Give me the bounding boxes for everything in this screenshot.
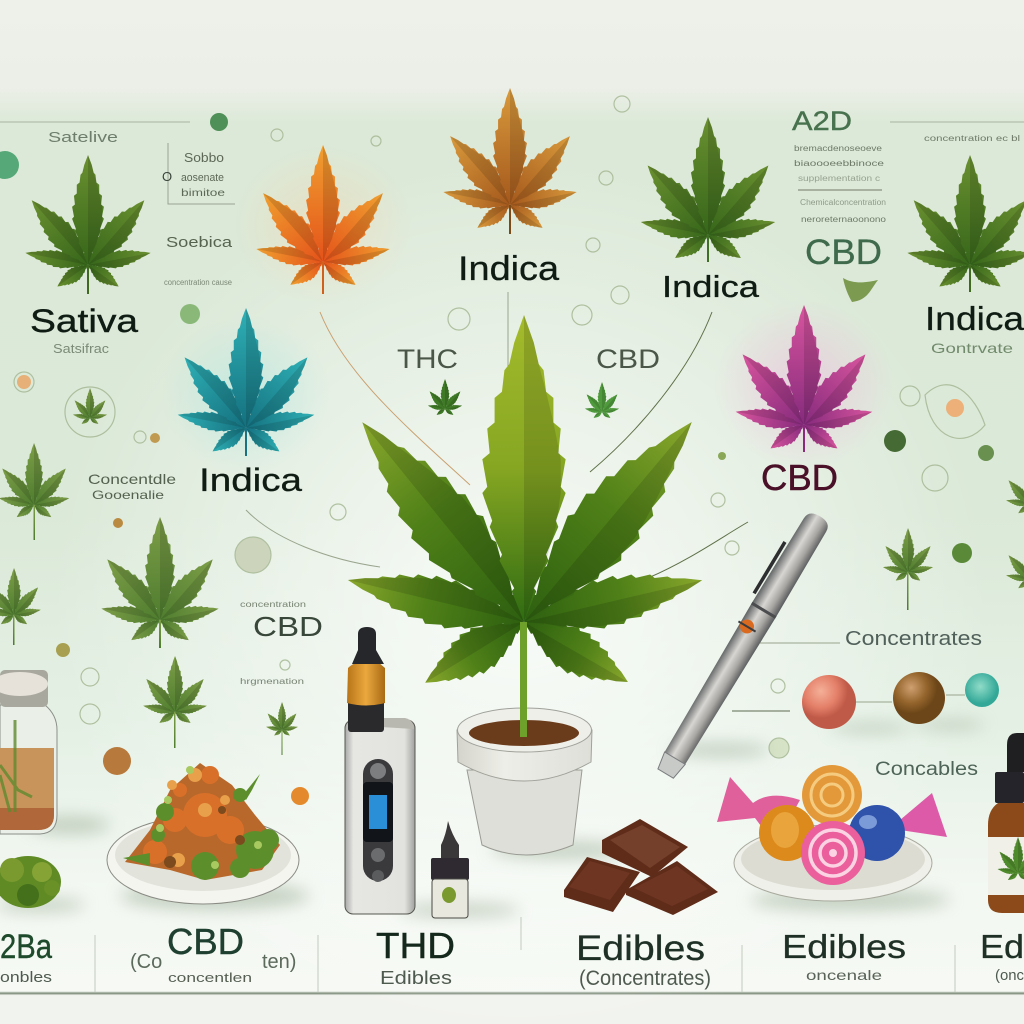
label: Edibles right: Edibles [782, 928, 906, 965]
label: A2D: A2D [792, 106, 852, 136]
text lines top right [794, 134, 1020, 224]
label: 2Ba: 2Ba [0, 928, 52, 966]
bottom labels [0, 921, 1024, 990]
scattered dots [0, 113, 994, 805]
label: small sativa under: Satsifrac [53, 341, 110, 356]
label: Edibles center: Edibles [576, 929, 705, 968]
label: Indica far right: Indica [925, 300, 1024, 337]
icon: small leaf THC [427, 379, 463, 417]
label: oncenale: oncenale [806, 967, 882, 983]
text lines top right: supplementation c [798, 174, 880, 183]
dropper bottle [988, 733, 1024, 913]
leaflet top [482, 315, 566, 622]
tiny text under Soebica: concentration cause [164, 278, 233, 287]
small bottle [431, 821, 469, 918]
label: Sativa: Sativa [30, 303, 138, 339]
leaf: small doodle [72, 388, 108, 426]
pot [457, 622, 592, 855]
object shadows [0, 720, 985, 917]
side leaves [0, 388, 1024, 755]
leaflet lower left [413, 602, 536, 702]
text lines top right: biaoooeebbinoce [794, 159, 885, 168]
leaf: magenta [714, 300, 894, 470]
leaf: left 4 [141, 656, 209, 748]
notes box top left: bimitoe [181, 188, 226, 199]
label: Concentrates right: Concentrates [845, 628, 982, 650]
label: CBD top right: CBD [805, 233, 882, 272]
text lines top right: neroreternaoonono [801, 215, 887, 224]
leaf: green top right [637, 117, 779, 265]
leaflet lateral right [518, 556, 708, 646]
leaf: right 1 [881, 528, 935, 610]
label: concentrate left: Gooenalie [92, 488, 164, 502]
jar [0, 670, 57, 834]
leaflet lower right [513, 602, 639, 702]
leaf: left 3 [0, 568, 42, 645]
label: Seebica: Soebica [166, 234, 233, 251]
label: paren left: (Co [130, 951, 162, 973]
leaflet upper left [335, 400, 551, 644]
food pile [123, 763, 280, 880]
label: CBD bottom: CBD [167, 921, 244, 962]
text lines top right: Chemicalconcentration [800, 198, 886, 207]
label: paren right: ten) [262, 951, 296, 973]
leaf: green far right [904, 155, 1024, 293]
text lines top right: bremacdenoseoeve [794, 144, 883, 153]
label: Indica teal: Indica [199, 462, 302, 498]
vape device [345, 627, 415, 914]
label: THC: THC [397, 344, 458, 374]
chocolate [564, 819, 718, 915]
leaf: orange [233, 145, 413, 305]
main cannabis plant [335, 315, 718, 702]
notes box top left: aosenate [181, 172, 224, 184]
label: Edibles far left: onbles [0, 969, 52, 986]
leaf: amber [439, 88, 581, 234]
leaflet upper right [497, 400, 718, 644]
label: concentrate left: Concentdle [88, 471, 176, 487]
leaflet lateral left [342, 556, 530, 646]
label: concentrate left [88, 471, 176, 502]
label: Contrate: Gontrvate [931, 340, 1013, 356]
leaf: green sativa [22, 155, 154, 294]
stem [520, 622, 527, 737]
leaf: left 2 [98, 517, 222, 648]
label: THD: THD [376, 925, 455, 966]
scattered doodles [14, 96, 985, 758]
icon: small leaf CBD [584, 382, 620, 420]
leaf: right 2 [1005, 463, 1024, 516]
candy plate [717, 765, 947, 901]
label: Ed far right: Ed [980, 928, 1024, 965]
leaf: left 1 [0, 443, 71, 540]
label: small left text [240, 600, 306, 686]
connector lines [246, 292, 965, 711]
label: CBD magenta: CBD [761, 457, 838, 498]
notes box top left: O [162, 169, 172, 184]
balls [802, 672, 999, 729]
label: Concentrates parenthetical: (Concentrates) [579, 967, 711, 990]
label: small left text: hrgmenation [240, 677, 304, 686]
label: Conc far right: (onc [995, 967, 1024, 984]
leaf: left 5 [265, 702, 299, 755]
label: small left text: concentration [240, 600, 306, 609]
label: Concables: Concables [875, 759, 978, 780]
label: CBD mid: CBD [596, 344, 660, 374]
icon: blob below CBD [843, 278, 878, 302]
label: small Sativa top: Satelive [48, 129, 118, 146]
label: Indica right: Indica [662, 269, 760, 304]
leaf: teal [161, 308, 331, 475]
text lines top right: concentration ec bl [924, 134, 1020, 143]
green bud [0, 856, 61, 908]
label: CBD left: CBD [253, 611, 323, 642]
label: Edibles under THD: Edibles [380, 968, 452, 988]
label: sub CBD: concentlen [168, 970, 252, 985]
notes box top left [162, 143, 235, 204]
notes box top left: Sobbo [184, 150, 224, 165]
label: Indica center: Indica [458, 250, 559, 288]
candy wrappers [717, 777, 800, 845]
pen vaporizer [651, 508, 832, 781]
leaf: right 3 [1005, 538, 1024, 591]
food plate [107, 763, 299, 904]
